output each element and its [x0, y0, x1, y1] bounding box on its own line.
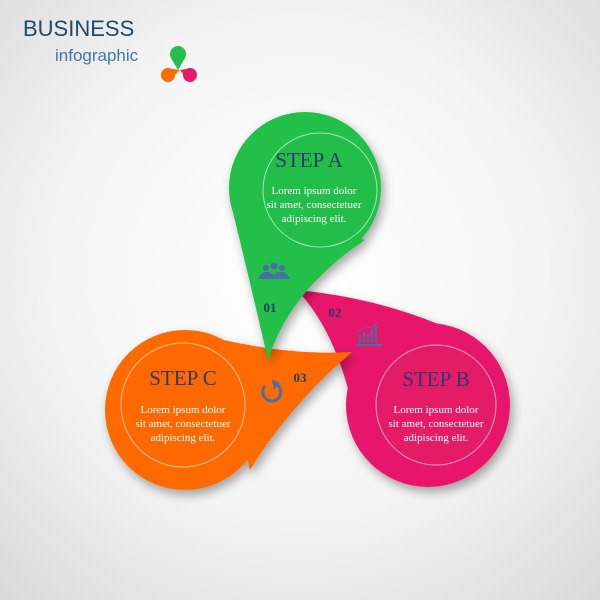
panel: step C: adipiscing elit. — [151, 432, 216, 444]
number 03: 03 — [294, 370, 307, 385]
icon: chart — [356, 322, 382, 345]
title: BUSINESS — [23, 16, 134, 41]
icon: refresh — [263, 380, 281, 401]
panel: step A — [229, 112, 381, 360]
number 02: 02 — [328, 305, 342, 320]
panel: step A: sit amet, consectetuer — [266, 199, 362, 211]
panel: step B: Lorem ipsum dolor — [394, 404, 479, 416]
panel: step A: adipiscing elit. — [282, 213, 347, 225]
panel: step C — [105, 330, 352, 490]
panel: step C: STEP C — [149, 366, 217, 390]
icon: logo — [161, 46, 197, 82]
icon: people — [258, 262, 290, 279]
panel: step B: STEP B — [402, 367, 470, 391]
number 01: 01 — [264, 300, 276, 315]
panel: step B: sit amet, consectetuer — [388, 418, 484, 430]
panel: step A: Lorem ipsum dolor — [272, 185, 357, 197]
panel: step B — [297, 290, 510, 487]
panel: step A: STEP A — [275, 148, 344, 172]
title — [23, 16, 139, 65]
panel: step C: Lorem ipsum dolor — [141, 404, 226, 416]
panel: step C: sit amet, consectetuer — [136, 418, 231, 430]
title: infographic — [55, 46, 139, 65]
panel: step B: adipiscing elit. — [404, 432, 469, 444]
